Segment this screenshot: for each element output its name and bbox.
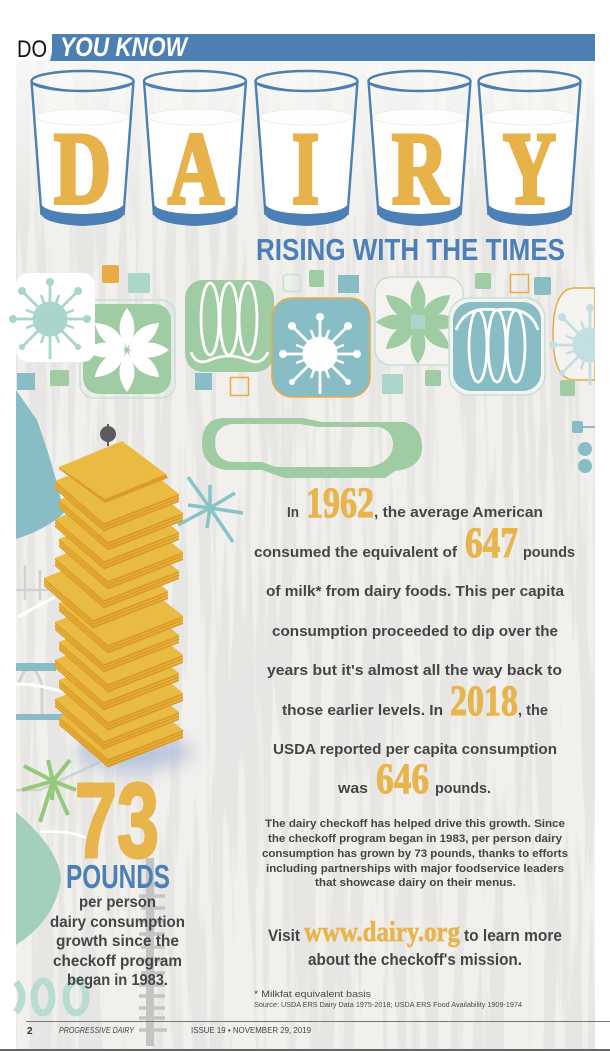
main statement text: pounds. bbox=[435, 780, 491, 797]
milk glasses spelling dairy: R bbox=[392, 112, 449, 226]
green pill outline bbox=[202, 418, 422, 478]
big stat 73 pounds: growth since the bbox=[56, 933, 179, 950]
footnotes bbox=[254, 989, 522, 1009]
big stat 73 pounds: 73 bbox=[75, 762, 159, 880]
teal cone shape bbox=[16, 390, 64, 539]
visit call to action: to learn more bbox=[464, 927, 562, 945]
main statement text: was bbox=[337, 780, 368, 797]
icon: stacked cheese slices bbox=[44, 441, 192, 770]
main statement text: 646 bbox=[376, 756, 429, 803]
visit call to action bbox=[268, 916, 562, 969]
big stat 73 pounds bbox=[50, 762, 185, 989]
checkoff paragraph: the checkoff program began in 1983, per person dairy bbox=[268, 833, 563, 845]
decorative tile row bbox=[10, 265, 610, 398]
visit call to action: www.dairy.org bbox=[304, 916, 460, 948]
checkoff paragraph bbox=[262, 818, 568, 889]
main statement text: , the bbox=[518, 702, 548, 719]
visit call to action: Visit bbox=[268, 927, 300, 945]
checkoff paragraph: including partnerships with major foodservice leaders bbox=[266, 863, 564, 875]
milk glasses spelling dairy: Y bbox=[503, 112, 556, 226]
footnotes: Source: USDA ERS Dairy Data 1975-2018; USDA ERS Food Availability 1909-1974 bbox=[254, 1002, 522, 1009]
main statement text bbox=[254, 480, 575, 803]
main statement text: 647 bbox=[465, 520, 518, 567]
page footer: ISSUE 19 • NOVEMBER 29, 2019 bbox=[191, 1026, 312, 1035]
main statement text: consumption proceeded to dip over the bbox=[272, 623, 558, 640]
main statement text: consumed the equivalent of bbox=[254, 544, 458, 561]
milk glasses spelling dairy: A bbox=[168, 112, 224, 226]
main statement text: pounds bbox=[523, 544, 575, 561]
main statement text: 1962 bbox=[306, 480, 374, 527]
big stat 73 pounds: dairy consumption bbox=[50, 914, 185, 931]
green starburst bbox=[22, 760, 76, 822]
right side teal dots bbox=[572, 421, 595, 473]
page footer: PROGRESSIVE DAIRY bbox=[59, 1026, 135, 1035]
main statement text: those earlier levels. In bbox=[282, 702, 443, 719]
header: do you know bbox=[17, 32, 595, 63]
checkoff paragraph: that showcase dairy on their menus. bbox=[315, 877, 516, 889]
header: do you know: YOU KNOW bbox=[60, 32, 189, 62]
main statement text: of milk* from dairy foods. This per capita bbox=[266, 583, 565, 600]
footnotes: * Milkfat equivalent basis bbox=[254, 989, 372, 999]
milk glasses spelling dairy: D bbox=[54, 112, 111, 226]
icon: teal starburst bbox=[178, 477, 243, 542]
big stat 73 pounds: checkoff program bbox=[53, 953, 182, 970]
main statement text: , the average American bbox=[374, 504, 543, 521]
main statement text: 2018 bbox=[450, 678, 518, 725]
main statement text: USDA reported per capita consumption bbox=[273, 741, 557, 758]
left grey and teal decoration bbox=[16, 565, 100, 838]
grey spine decoration bbox=[139, 858, 167, 1046]
small squares bbox=[17, 265, 575, 396]
page footer: 2 bbox=[27, 1026, 33, 1037]
icon: grey dot bbox=[100, 424, 116, 446]
checkoff paragraph: consumption has grown by 73 pounds, thanks to efforts bbox=[262, 848, 568, 860]
checkoff paragraph: The dairy checkoff has helped drive this growth. Since bbox=[265, 818, 565, 830]
pale rings bbox=[16, 981, 86, 1013]
light green circle bbox=[16, 812, 61, 945]
main statement text: years but it's almost all the way back to bbox=[267, 662, 562, 679]
big stat 73 pounds: POUNDS bbox=[66, 858, 170, 895]
big stat 73 pounds: began in 1983. bbox=[67, 972, 168, 989]
header: do you know: DO bbox=[17, 36, 47, 63]
big stat 73 pounds: per person bbox=[79, 894, 156, 911]
milk glasses spelling dairy bbox=[32, 71, 580, 226]
page footer bbox=[0, 1021, 610, 1051]
main statement text: In bbox=[287, 504, 299, 521]
milk glasses spelling dairy: I bbox=[292, 112, 319, 226]
visit call to action: about the checkoff's mission. bbox=[308, 951, 522, 969]
